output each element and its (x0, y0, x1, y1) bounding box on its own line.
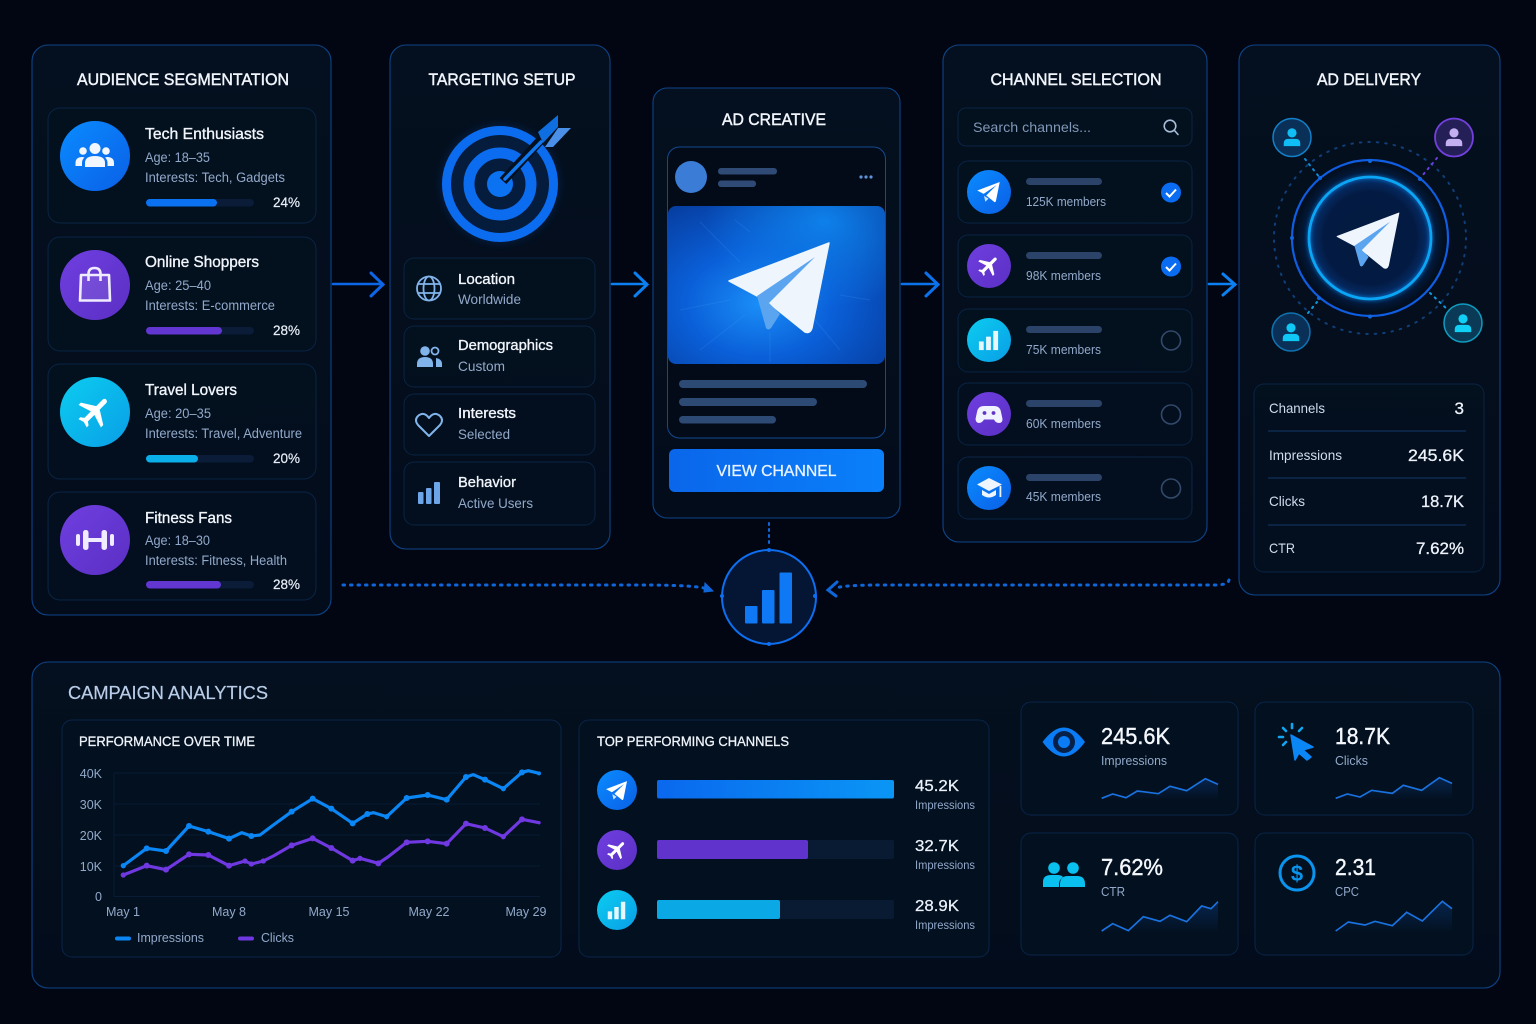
chart legend: Impressions (137, 931, 204, 945)
user node: top left (1273, 118, 1311, 156)
card: travel lovers: 20% (273, 451, 300, 466)
card: location: Location (458, 271, 515, 288)
placeholder header lines (718, 168, 777, 187)
KPI card: impressions (1021, 702, 1238, 815)
icon: people (60, 121, 130, 191)
arrow: creative to channels (902, 273, 938, 296)
icon: graduation cap (967, 466, 1011, 510)
heading: targeting setup: TARGETING SETUP (428, 70, 576, 89)
KPI card: CTR: CTR (1101, 884, 1125, 899)
icon: eye (1042, 728, 1085, 756)
channel bar 1: 45.2K (915, 778, 959, 795)
card: tech enthusiasts: Interests: Tech, Gadgets (145, 170, 285, 185)
channel bar 3: 28.9K (915, 898, 959, 915)
chart legend (115, 931, 294, 945)
line chart: 30K (80, 798, 103, 812)
search box: Search channels... (973, 119, 1091, 135)
chart panel: top performing channels (579, 720, 989, 957)
card: tech enthusiasts: 24% (273, 195, 300, 210)
progress bar 28% (146, 327, 254, 334)
icon: cursor click (1279, 724, 1313, 760)
line chart: 40K (80, 767, 103, 781)
heading: channel selection: CHANNEL SELECTION (990, 70, 1162, 89)
placeholder text lines (679, 380, 867, 424)
channel bar 3 (597, 890, 975, 932)
panel: ad delivery (1239, 45, 1500, 595)
icon: airplane (60, 377, 130, 447)
card: travel lovers: Age: 20–35 (145, 406, 211, 421)
line chart: 20K (80, 829, 103, 843)
panel: campaign analytics (32, 662, 1500, 988)
KPI card: CPC: CPC (1335, 884, 1359, 899)
user node: bottom left (1272, 313, 1310, 351)
checkbox empty (1162, 331, 1180, 350)
icon: globe (417, 276, 441, 300)
avatar (675, 161, 707, 193)
line chart: May 29 (506, 905, 547, 919)
channel bar 1: Impressions (915, 798, 975, 812)
sparkline (1336, 778, 1452, 800)
series: impressions (121, 769, 541, 868)
icon: people (417, 346, 442, 367)
chart legend: Clicks (261, 931, 294, 945)
KPI card: impressions: 245.6K (1101, 723, 1171, 749)
card: fitness fans: Fitness Fans (145, 510, 232, 527)
channel bar 1 (597, 770, 975, 812)
card: fitness fans (48, 492, 316, 600)
series: clicks (121, 816, 541, 878)
heading: audience segmentation: AUDIENCE SEGMENTATION (77, 70, 289, 89)
card: demographics: Demographics (458, 337, 553, 354)
line chart: May 15 (308, 905, 350, 919)
icon: airplane (967, 244, 1011, 288)
stats table: Impressions (1269, 447, 1342, 463)
chart panel: performance over time (62, 720, 561, 957)
line chart (80, 767, 547, 919)
panel: channel selection (943, 45, 1207, 542)
card: fitness fans: Age: 18–30 (145, 533, 210, 548)
stats table (1254, 384, 1484, 572)
KPI card: CTR (1021, 833, 1238, 955)
icon: dumbbell (60, 505, 130, 575)
delivery hub graphic (1274, 142, 1466, 334)
icon: plane (967, 170, 1011, 214)
stats table: Channels (1269, 400, 1325, 416)
KPI card: clicks: 18.7K (1335, 723, 1391, 749)
stats table: 7.62% (1416, 539, 1464, 558)
icon: bars (967, 318, 1011, 362)
panel: targeting setup (390, 45, 610, 549)
heading: ad creative: AD CREATIVE (722, 110, 826, 129)
ad mockup card (668, 147, 886, 438)
card: interests: Selected (458, 426, 510, 442)
search box (958, 108, 1192, 146)
checkbox empty (1162, 479, 1180, 498)
heading: campaign analytics: CAMPAIGN ANALYTICS (68, 683, 268, 703)
channel bar 2: 32.7K (915, 838, 959, 855)
KPI card: impressions: Impressions (1101, 753, 1167, 768)
sparkline (1336, 901, 1452, 933)
stats table: 18.7K (1421, 492, 1465, 511)
card: interests: Interests (458, 405, 516, 422)
card: travel lovers (48, 364, 316, 479)
card: behavior: Active Users (458, 495, 533, 511)
channel bar 3: Impressions (915, 918, 975, 932)
button: view channel (669, 449, 884, 492)
icon: analytics hub (720, 548, 817, 646)
stats table: Clicks (1269, 493, 1305, 509)
channel row: 75K (958, 309, 1192, 372)
icon: shopping bag (60, 250, 130, 320)
KPI card: CPC (1255, 833, 1473, 955)
line chart: May 8 (212, 905, 246, 919)
KPI card: clicks (1255, 702, 1473, 815)
heading: ad delivery: AD DELIVERY (1317, 70, 1421, 89)
progress bar 28% (146, 581, 254, 588)
menu dots (859, 175, 873, 179)
card: fitness fans: Interests: Fitness, Health (145, 553, 287, 568)
icon: heart (416, 414, 442, 436)
KPI card: clicks: Clicks (1335, 753, 1368, 768)
arrow: audience to targeting (333, 273, 383, 296)
card: location: Worldwide (458, 291, 521, 307)
channel bar 2: Impressions (915, 858, 975, 872)
channel row: 125K: 125K members (1026, 195, 1106, 209)
icon: bars (418, 482, 440, 504)
line chart: May 22 (408, 905, 450, 919)
checkbox empty (1162, 405, 1180, 424)
sparkline (1102, 779, 1218, 800)
button: view channel: VIEW CHANNEL (716, 463, 837, 480)
arrow: channels to delivery (1209, 274, 1235, 295)
card: travel lovers: Interests: Travel, Adventure (145, 426, 302, 441)
icon: gamepad (967, 392, 1011, 436)
panel: ad creative (653, 88, 900, 518)
card: travel lovers: Travel Lovers (145, 382, 237, 399)
ad image with telegram plane (668, 206, 885, 364)
progress bar 20% (146, 455, 254, 462)
sparkline (1102, 902, 1218, 933)
feedback loop: dotted connectors (343, 523, 1229, 596)
card: online shoppers: 28% (273, 323, 300, 338)
card: online shoppers: Age: 25–40 (145, 278, 211, 293)
panel: audience segmentation (32, 45, 331, 615)
user node: top right (1435, 118, 1473, 156)
card: demographics (404, 326, 595, 387)
channel row: 45K: 45K members (1026, 490, 1101, 504)
card: demographics: Custom (458, 358, 505, 374)
card: behavior (404, 462, 595, 525)
channel row: 60K: 60K members (1026, 417, 1101, 431)
checkbox checked (1161, 182, 1181, 202)
checkbox checked (1161, 256, 1181, 276)
line chart: May 1 (106, 905, 140, 919)
chart panel: performance over time: PERFORMANCE OVER TIME (79, 733, 255, 749)
channel row: 98K: 98K members (1026, 269, 1101, 283)
card: online shoppers: Interests: E-commerce (145, 298, 275, 313)
channel row: 45K (958, 457, 1192, 519)
chart panel: top performing channels: TOP PERFORMING CHANNELS (597, 733, 789, 749)
card: behavior: Behavior (458, 474, 516, 491)
card: tech enthusiasts: Tech Enthusiasts (145, 126, 264, 143)
card: online shoppers: Online Shoppers (145, 254, 259, 271)
icon: target with arrow (440, 115, 571, 244)
stats table: 3 (1455, 399, 1464, 418)
channel row: 98K (958, 235, 1192, 297)
card: fitness fans: 28% (273, 577, 300, 592)
channel row: 75K: 75K members (1026, 343, 1101, 357)
line chart: 10K (80, 860, 103, 874)
channel row: 60K (958, 383, 1192, 445)
icon: dollar coin: $ (1291, 861, 1303, 886)
KPI card: CPC: 2.31 (1335, 854, 1376, 880)
progress bar 24% (146, 199, 254, 206)
card: tech enthusiasts (48, 108, 316, 223)
card: location (404, 258, 595, 319)
icon: two people (1043, 862, 1085, 887)
channel bar 2 (597, 830, 975, 872)
card: tech enthusiasts: Age: 18–35 (145, 150, 210, 165)
arrow: targeting to creative (612, 273, 647, 296)
user node: bottom right (1444, 304, 1482, 342)
stats table: CTR (1269, 540, 1295, 556)
card: interests (404, 394, 595, 455)
channel row: 125K (958, 161, 1192, 223)
stats table: 245.6K (1408, 446, 1465, 465)
line chart: 0 (95, 890, 102, 904)
card: online shoppers (48, 237, 316, 351)
icon: dollar coin (1280, 856, 1314, 890)
KPI card: CTR: 7.62% (1101, 854, 1163, 880)
